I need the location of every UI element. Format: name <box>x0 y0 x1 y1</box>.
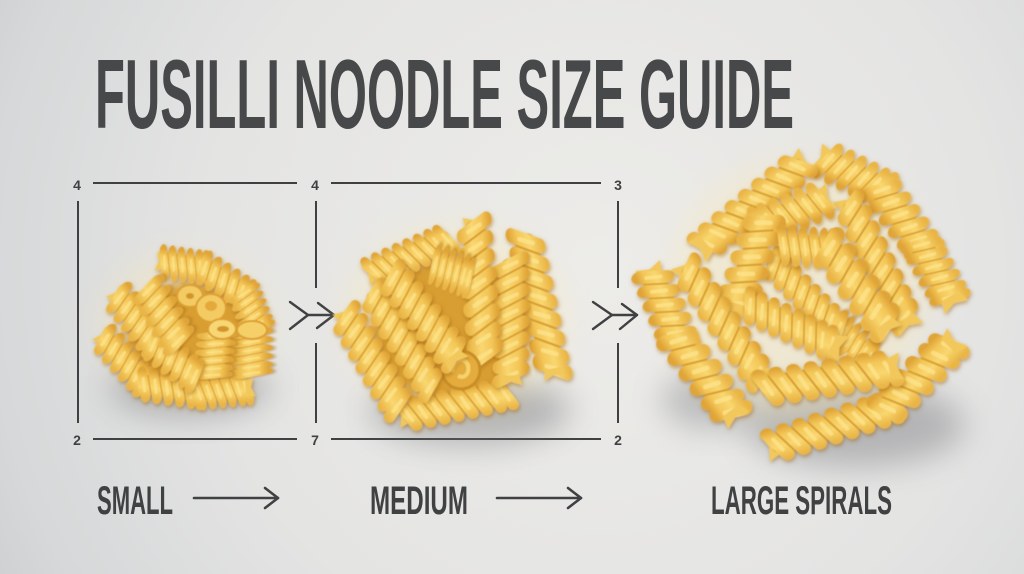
spiral: middle diagonal <box>739 292 850 361</box>
spiral: front diagonal <box>379 264 469 372</box>
dark core <box>372 258 528 402</box>
spiral: top arc <box>154 251 271 337</box>
curled chunk <box>428 252 476 291</box>
spiral: long bottom <box>761 327 967 462</box>
spiral: centre vertical <box>461 215 499 363</box>
dimension numbers: 7 <box>311 432 319 448</box>
label: small: SMALL <box>97 479 173 523</box>
arrow: small to medium label <box>194 488 278 508</box>
spiral: left inner <box>361 284 444 397</box>
spiral: tall coil centre <box>200 331 229 379</box>
pasta pile: small <box>92 251 271 404</box>
dimension frame: large side <box>617 201 619 423</box>
spiral: under arc <box>761 251 851 341</box>
pasta pile: medium <box>332 215 567 428</box>
spiral: long top right <box>810 143 969 314</box>
spiral: second left <box>670 254 778 391</box>
ring ends <box>177 285 267 339</box>
shadows and warm glow under the pasta <box>100 160 965 467</box>
swirl at bottom centre <box>442 351 480 389</box>
spiral: top left <box>688 147 817 263</box>
spiral: far left <box>635 260 750 429</box>
spiral: centre arc <box>779 232 903 342</box>
dark core <box>128 283 252 387</box>
spiral: lower front <box>758 352 904 402</box>
arrow: medium to large label <box>497 488 581 508</box>
spiral: bottom curve <box>92 326 256 404</box>
dimension frame: medium <box>316 183 601 439</box>
pasta pile: large <box>635 143 969 462</box>
spiral: hooked centre left <box>719 183 837 320</box>
dimension numbers: 2 <box>614 432 622 448</box>
spiral: left diagonal <box>106 284 204 387</box>
spiral: left outer <box>332 303 412 417</box>
dimension numbers: 3 <box>614 177 622 193</box>
spiral: far right <box>511 230 567 381</box>
label: medium: MEDIUM <box>370 479 468 523</box>
dimension numbers: 2 <box>73 432 81 448</box>
spiral: tall coil right <box>239 331 265 376</box>
spiral: hooked piece <box>136 280 191 350</box>
arrow: small to medium frames <box>290 302 334 329</box>
spiral: right inner <box>833 189 923 336</box>
dimension frame: small <box>78 183 297 439</box>
dimension numbers <box>73 177 622 448</box>
arrow: medium to large frames <box>593 302 637 329</box>
spiral: right vertical <box>498 257 524 386</box>
dimension numbers: 4 <box>311 177 319 193</box>
spiral: bottom <box>395 381 513 428</box>
dimension numbers: 4 <box>73 177 81 193</box>
spiral: top left <box>361 226 456 286</box>
spiral: back stub <box>826 316 879 369</box>
